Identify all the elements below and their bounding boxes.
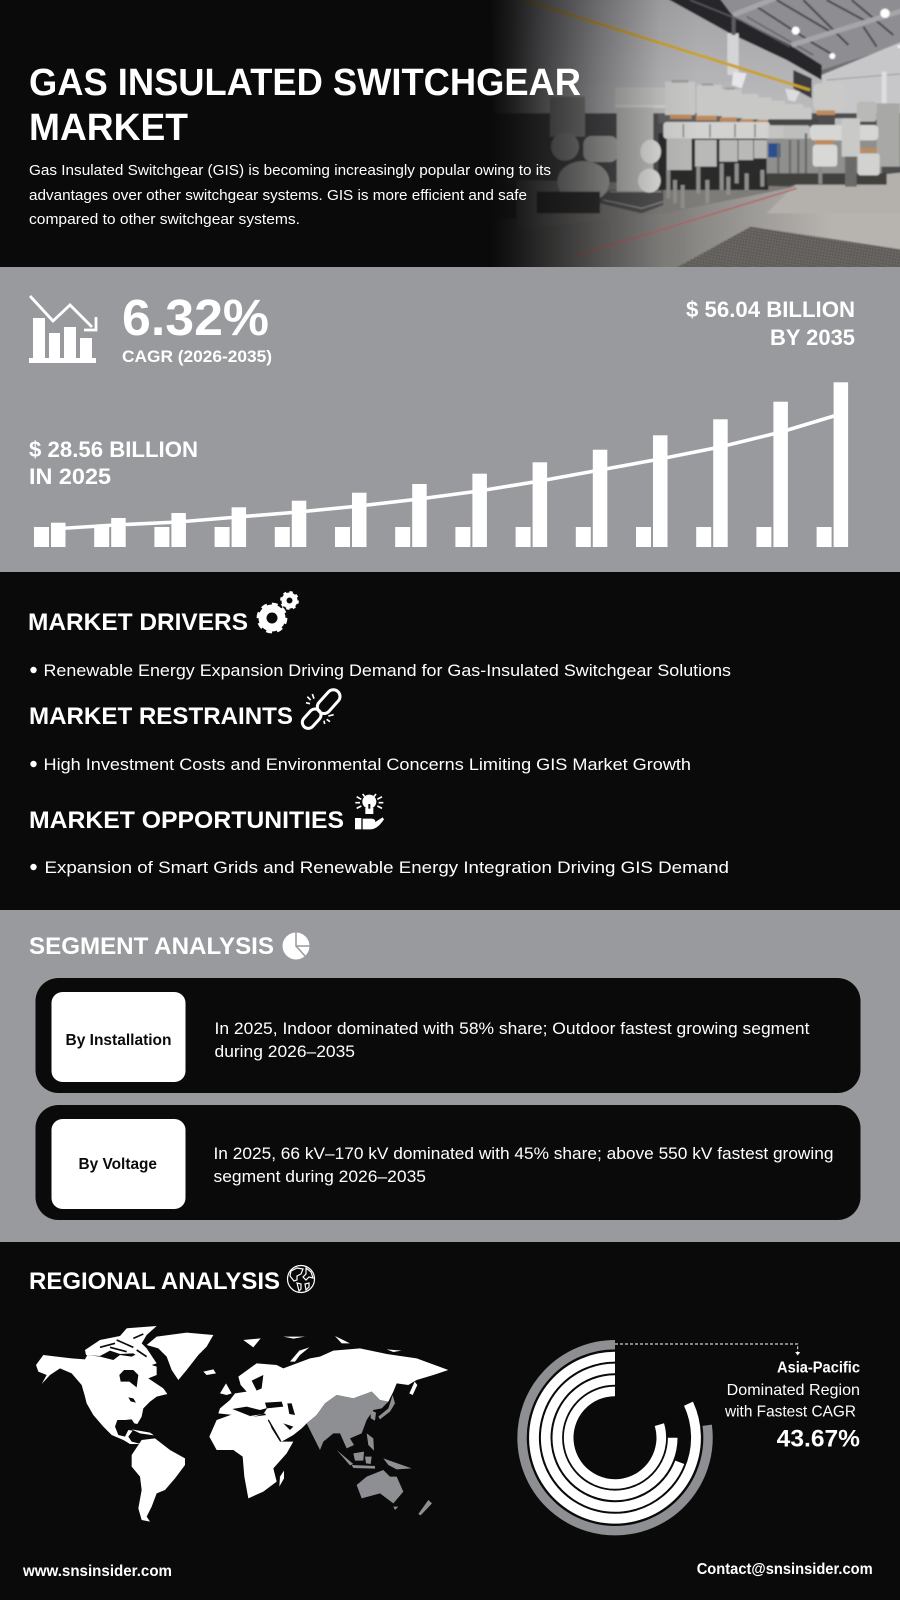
intro paragraph: compared to other switchgear systems. <box>29 211 300 228</box>
2035 market value <box>686 297 855 350</box>
CAGR label: CAGR (2026-2035) <box>122 347 272 366</box>
map: eurasia <box>218 1348 448 1442</box>
description: installation <box>214 1020 810 1061</box>
icon: declining chart <box>29 296 96 363</box>
map: inland waters <box>100 1334 295 1440</box>
intro paragraph: Gas Insulated Switchgear (GIS) is becoming increasingly popular owing to its <box>29 162 551 179</box>
driver text: Renewable Energy Expansion Driving Demand for Gas-Insulated Switchgear Solutions <box>44 661 731 680</box>
description: voltage <box>214 1145 834 1186</box>
map: arctic islands <box>85 1326 157 1367</box>
heading: regional analysis: REGIONAL ANALYSIS <box>29 1268 280 1295</box>
icon: globe <box>288 1266 314 1292</box>
intro paragraph: advantages over other switchgear systems. GIS is more efficient and safe <box>29 187 527 204</box>
description: voltage: In 2025, 66 kV–170 kV dominated with 45% share; above 550 kV fastest growing <box>214 1145 834 1163</box>
heading: market restraints: MARKET RESTRAINTS <box>29 703 293 730</box>
world map <box>36 1326 448 1522</box>
callout: asia-pacific: Dominated Region <box>727 1382 860 1399</box>
title: MARKET <box>29 107 188 149</box>
photo: switchgear hall <box>480 0 900 277</box>
dashed connector arrow <box>615 1344 800 1356</box>
label: by voltage <box>52 1119 186 1209</box>
heading: market drivers: MARKET DRIVERS <box>28 609 248 636</box>
2035 market value: $ 56.04 BILLION <box>686 297 855 322</box>
map: asia-pacific highlighted <box>307 1392 432 1515</box>
label: by voltage: By Voltage <box>78 1156 157 1173</box>
map: north america <box>36 1353 167 1444</box>
heading: segment analysis: SEGMENT ANALYSIS <box>29 933 274 960</box>
panel: segment analysis <box>0 910 900 1242</box>
2025 market value: IN 2025 <box>29 464 111 489</box>
callout: asia-pacific: with Fastest CAGR <box>724 1404 856 1421</box>
icon: gears <box>258 592 298 632</box>
panel: market dynamics <box>0 572 900 910</box>
panel: market size and CAGR <box>0 267 900 572</box>
description: installation: during 2026–2035 <box>214 1043 355 1061</box>
map: northern islands <box>220 1336 417 1395</box>
label: by installation: By Installation <box>66 1032 172 1049</box>
2025 market value <box>29 437 198 489</box>
panel: regional analysis <box>0 1242 900 1600</box>
icon: broken chain <box>300 687 343 731</box>
footer: contact: Contact@snsinsider.com <box>697 1561 873 1578</box>
map: madagascar <box>279 1471 284 1487</box>
restraint text: High Investment Costs and Environmental Concerns Limiting GIS Market Growth <box>44 755 691 774</box>
map: africa <box>209 1414 293 1498</box>
opportunity text: Expansion of Smart Grids and Renewable Energy Integration Driving GIS Demand <box>44 858 729 877</box>
label: by installation <box>52 992 186 1082</box>
callout: asia-pacific <box>724 1360 860 1453</box>
map: greenland <box>147 1333 213 1380</box>
map: iceland <box>203 1369 216 1375</box>
card: by voltage <box>36 1105 860 1220</box>
map: caribbean <box>132 1429 154 1435</box>
2035 market value: BY 2035 <box>770 325 855 350</box>
donut chart: regional share <box>522 1345 708 1531</box>
panel: header <box>0 0 900 277</box>
map: south america <box>132 1438 185 1522</box>
footer: website: www.snsinsider.com <box>22 1563 172 1580</box>
icon: pie chart <box>282 932 310 960</box>
bar chart: market growth <box>34 382 848 547</box>
2025 market value: $ 28.56 BILLION <box>29 437 198 462</box>
icon: bulb in hand <box>355 794 384 829</box>
callout: asia-pacific: 43.67% <box>777 1426 860 1453</box>
description: installation: In 2025, Indoor dominated with 58% share; Outdoor fastest growing segment <box>214 1020 810 1038</box>
CAGR value: 6.32% <box>122 289 269 346</box>
title <box>29 62 581 149</box>
title: GAS INSULATED SWITCHGEAR <box>29 62 581 104</box>
callout: asia-pacific: Asia-Pacific <box>777 1360 860 1377</box>
heading: market opportunities: MARKET OPPORTUNITIES <box>29 807 344 834</box>
card: by installation <box>36 978 860 1093</box>
intro paragraph <box>29 162 551 228</box>
trend line <box>52 416 834 529</box>
description: voltage: segment during 2026–2035 <box>214 1168 426 1186</box>
